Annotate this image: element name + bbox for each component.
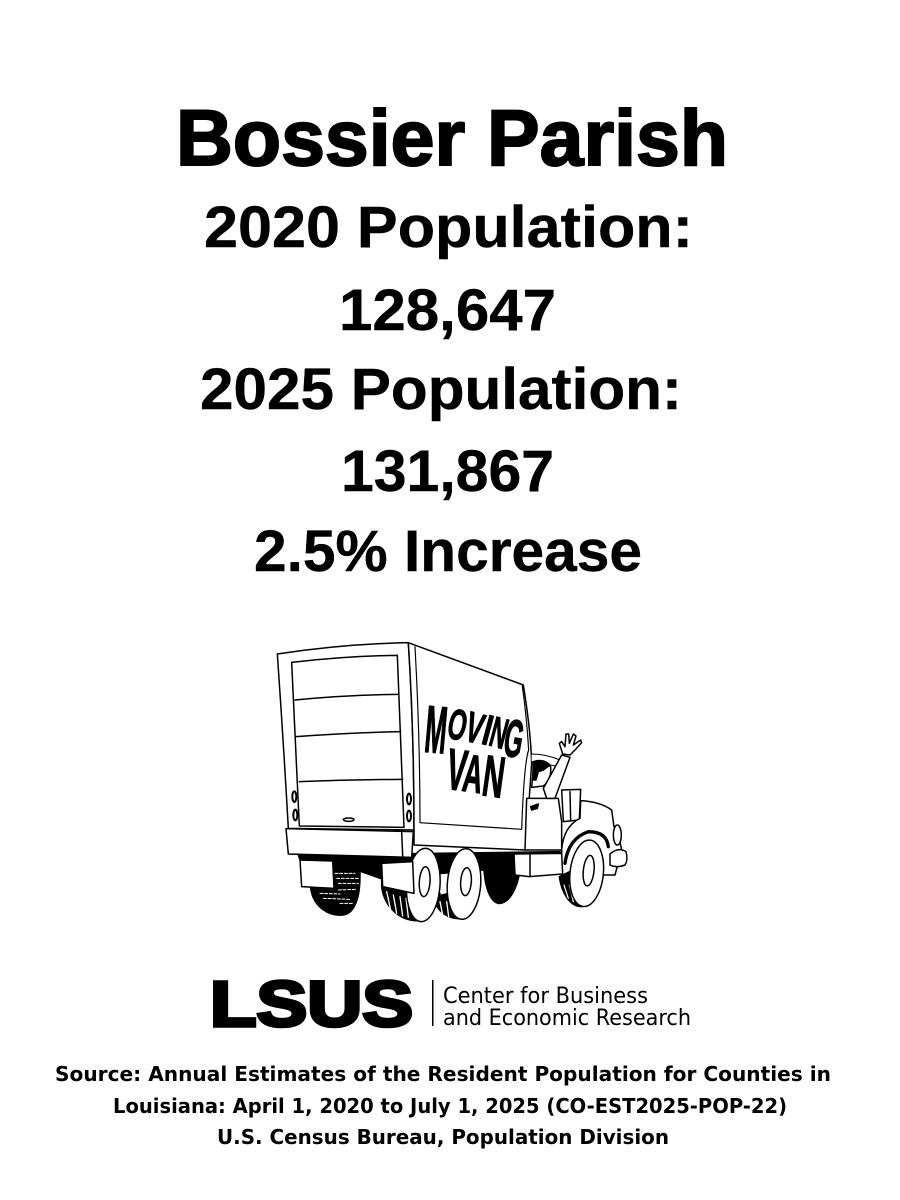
van side lettering: A: [459, 743, 487, 805]
door slats: [295, 694, 403, 782]
text block: population statistics: [200, 195, 693, 584]
mud flap centre: [382, 862, 414, 893]
logo caption: [443, 984, 691, 1031]
hood: [562, 801, 622, 875]
running board: [514, 853, 563, 877]
logo divider: [432, 980, 434, 1026]
source note: U.S. Census Bureau, Population Division: [217, 1125, 669, 1149]
van side lettering: V: [460, 703, 490, 754]
front bumper: [610, 850, 627, 867]
van side lettering: V: [443, 736, 471, 804]
logo wordmark: LSUS: [210, 968, 413, 1040]
2025 population value: 131,867: [341, 439, 554, 504]
2020 population label: 2020 Population:: [204, 195, 693, 260]
headlight: [613, 825, 621, 845]
under-body shadow: [298, 852, 560, 903]
percent increase: 2.5% Increase: [254, 519, 642, 584]
front wheel: [567, 838, 607, 908]
van side lettering: G: [500, 708, 528, 770]
cab roof: [532, 754, 562, 767]
door lights and handle: [292, 791, 296, 802]
source note: Source: Annual Estimates of the Resident Population for Counties in: [55, 1062, 831, 1086]
van side lettering: I: [478, 705, 498, 754]
van side panel: [408, 643, 532, 850]
2020 population value: 128,647: [339, 278, 556, 343]
logo: LSUS Center for Business and Economic Research: [210, 968, 691, 1040]
van side lettering: O: [443, 700, 472, 751]
van side lettering: [422, 691, 528, 810]
van side lettering: N: [485, 709, 513, 759]
cab: [525, 798, 562, 850]
logo caption: Center for Business: [443, 984, 648, 1009]
van side lettering: N: [479, 742, 509, 810]
front wheel tread: [559, 863, 587, 907]
rear mud flap left: [300, 860, 334, 888]
2025 population label: 2025 Population:: [200, 357, 682, 422]
rear wheel 1: [404, 847, 443, 923]
far rear wheel shadow: [310, 857, 360, 915]
icon: moving van illustration: [277, 643, 627, 923]
rear wheel 2: [445, 848, 483, 920]
rear door panel: [277, 643, 414, 830]
rear dual wheel treads: [382, 860, 440, 921]
rear door window: [292, 655, 404, 827]
source note: [55, 1062, 831, 1149]
van side lettering: M: [422, 691, 450, 768]
title: Bossier Parish: [176, 93, 728, 182]
driver's arm and waving hand: [543, 755, 570, 798]
source note: Louisiana: April 1, 2020 to July 1, 2025 (CO-EST2025-POP-22): [113, 1094, 787, 1118]
windshield: [562, 789, 581, 822]
front fender arch: [565, 832, 608, 863]
driver: [532, 761, 551, 787]
rear bumper: [286, 829, 413, 857]
logo caption: and Economic Research: [443, 1006, 691, 1031]
